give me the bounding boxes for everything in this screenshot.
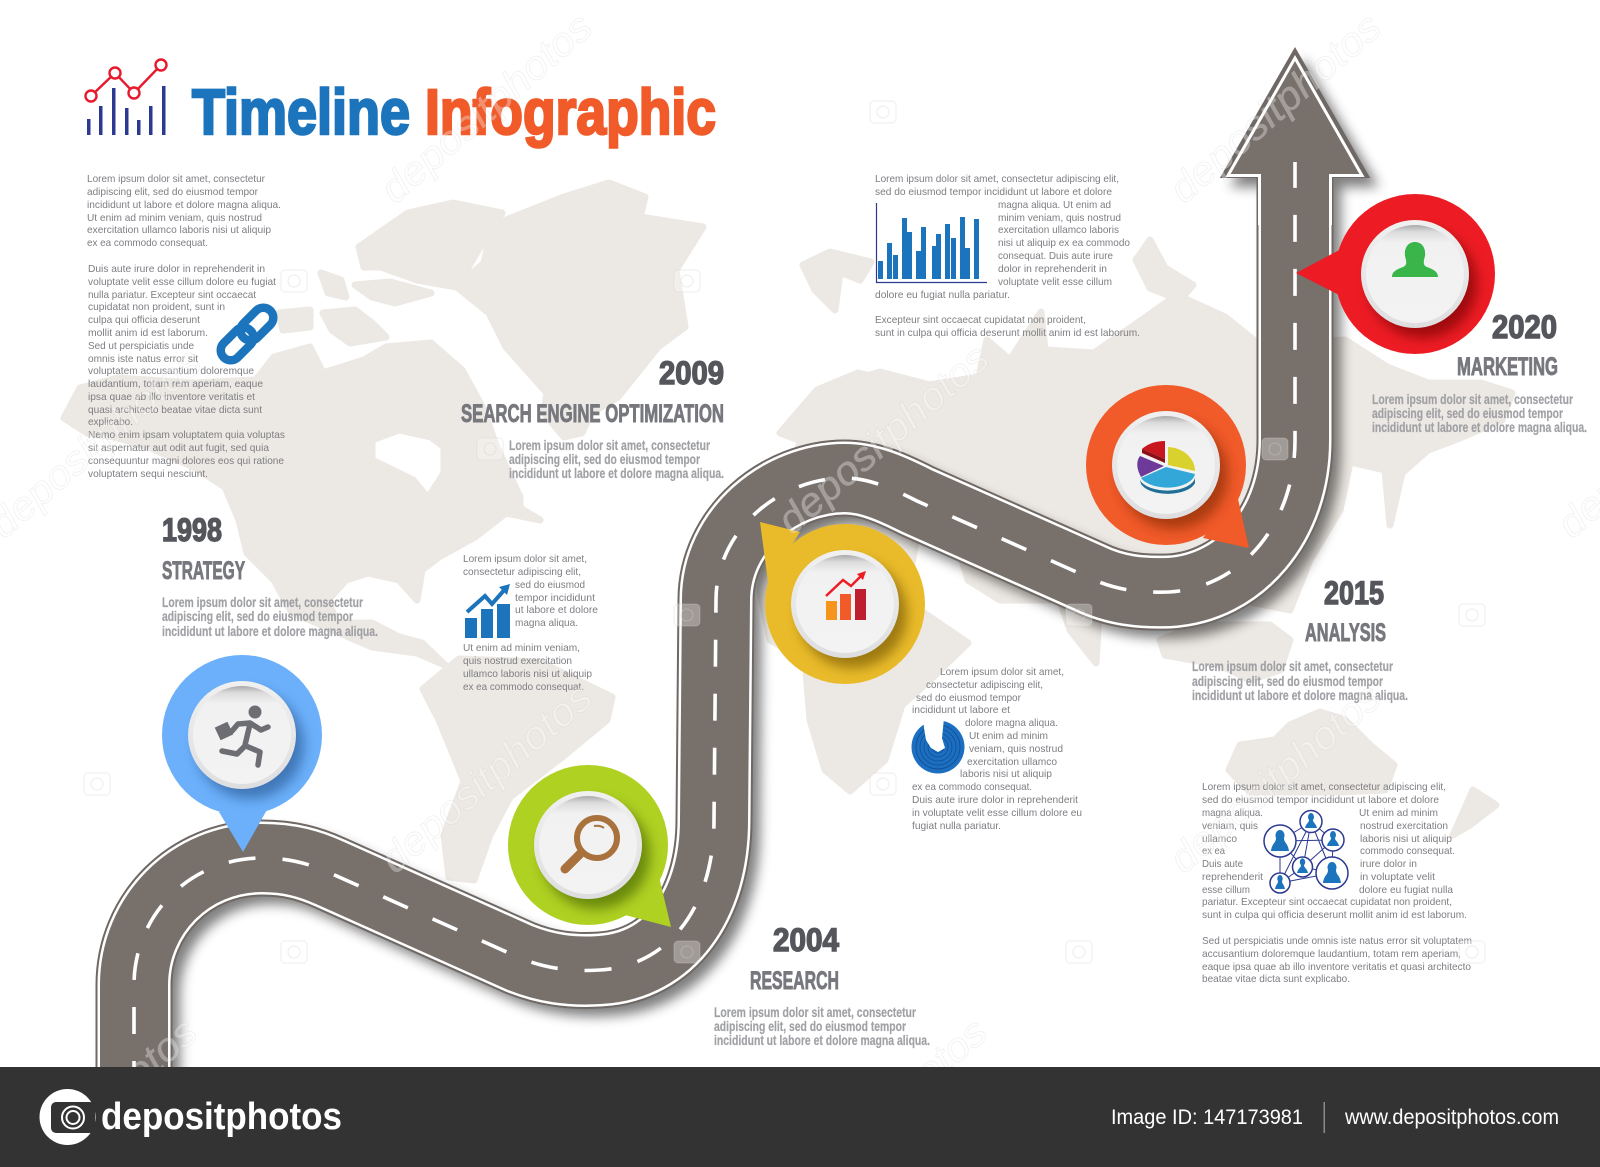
title icon: chart — [86, 60, 166, 135]
text block: middle left with growth chart: ullamco laboris nisi ut aliquip — [463, 669, 592, 680]
text block: top left: omnis iste natus error sit — [88, 354, 198, 365]
milestone 2009: yellow pin — [760, 522, 925, 684]
watermarks: depositphotos — [769, 336, 998, 543]
text block: middle left with growth chart: consectetur adipiscing elit, — [463, 567, 581, 578]
text block: top centre with bar chart: minim veniam, quis nostrud — [998, 213, 1121, 224]
label: 2009 search engine optimization: SEARCH ENGINE OPTIMIZATION — [461, 400, 724, 428]
milestone 1998: blue pin — [162, 655, 322, 852]
text block: top left: culpa qui officia deserunt — [88, 315, 200, 326]
icon: pie chart — [1137, 441, 1195, 494]
text block: centre with radial chart: exercitation ullamco — [967, 757, 1057, 768]
text block: lower right with network icon — [1202, 782, 1472, 985]
text block: top left: Lorem ipsum dolor sit amet, consectetur — [87, 174, 266, 185]
text block: top left: incididunt ut labore et dolore magna aliqua. — [87, 200, 281, 211]
text block: top centre with bar chart: Lorem ipsum dolor sit amet, consectetur adipiscing elit, — [875, 174, 1119, 185]
label: 1998 strategy: STRATEGY — [162, 557, 245, 585]
label: 2009 search engine optimization: 2009 — [659, 355, 724, 391]
text block: lower right with network icon: Ut enim ad minim — [1359, 808, 1438, 819]
icon: person — [1392, 242, 1438, 277]
text block: top centre with bar chart: Excepteur sint occaecat cupidatat non proident, — [875, 315, 1086, 326]
text block: centre with radial chart: Ut enim ad minim — [969, 731, 1048, 742]
text block: centre with radial chart: incididunt ut labore et — [912, 705, 1010, 716]
label: 2004 research: RESEARCH — [750, 967, 839, 995]
label: 2009 search engine optimization: adipiscing elit, sed do eiusmod tempor — [509, 452, 701, 467]
world map — [64, 183, 1512, 880]
footer image id: Image ID: 147173981 — [1111, 1106, 1303, 1129]
text block: middle left with growth chart: magna aliqua. — [515, 618, 578, 629]
text block: centre with radial chart: fugiat nulla pariatur. — [912, 821, 1001, 832]
road shadow — [143, 59, 1379, 1099]
label: 2020 marketing — [1372, 309, 1587, 435]
text block: top left: ipsa quae ab illo inventore veritatis et — [88, 392, 255, 403]
text block: lower right with network icon: irure dolor in — [1360, 859, 1417, 870]
label: 1998 strategy: 1998 — [162, 512, 222, 548]
text block: top centre with bar chart: dolore eu fugiat nulla pariatur. — [875, 290, 1010, 301]
text block: centre with radial chart: sed do eiusmod tempor — [916, 693, 1022, 704]
text block: centre with radial chart: veniam, quis nostrud — [969, 744, 1063, 755]
footer url: www.depositphotos.com — [1344, 1106, 1559, 1129]
text block: lower right with network icon: Sed ut perspiciatis unde omnis iste natus error sit voluptatem — [1202, 936, 1472, 947]
icon: running businessman — [215, 706, 268, 765]
watermarks: depositphotos — [372, 5, 601, 212]
icon: magnifier — [565, 818, 617, 869]
text block: lower right with network icon: magna aliqua. — [1202, 808, 1263, 819]
icon: people network — [1264, 810, 1348, 893]
watermarks: depositphotos — [372, 675, 601, 882]
text block: top left: sit aspernatur aut odit aut fugit, sed quia — [88, 443, 269, 454]
text block: lower right with network icon: laboris nisi ut aliquip — [1360, 834, 1452, 845]
footer logo — [40, 1089, 342, 1145]
road surface — [134, 178, 1295, 1090]
label: 2015 analysis — [1192, 575, 1408, 703]
bar chart — [876, 203, 987, 282]
text block: centre with radial chart: consectetur adipiscing elit, — [926, 680, 1043, 691]
label: 2015 analysis: 2015 — [1324, 575, 1384, 611]
text block: top centre with bar chart: sunt in culpa qui officia deserunt mollit anim id est laborum. — [875, 328, 1140, 339]
road — [134, 53, 1379, 1099]
text block: top left: consequuntur magni dolores eos qui ratione — [88, 456, 284, 467]
text block: top left: exercitation ullamco laboris nisi ut aliquip — [87, 225, 271, 236]
text block: top centre with bar chart — [875, 174, 1140, 339]
text block: lower right with network icon: sed do eiusmod tempor incididunt ut labore et dolore — [1202, 795, 1439, 806]
text block: middle left with growth chart: ut labore et dolore — [515, 605, 598, 616]
text block: top left: laudantium, totam rem aperiam, eaque — [88, 379, 263, 390]
text block: lower right with network icon: esse cillum — [1202, 885, 1250, 896]
text block: top left: quasi architecto beatae vitae dicta sunt — [88, 405, 262, 416]
label: 2004 research: incididunt ut labore et dolore magna aliqua. — [714, 1033, 930, 1048]
text block: centre with radial chart — [912, 667, 1082, 832]
text block: lower right with network icon: accusantium doloremque laudantium, totam rem aperiam, — [1202, 949, 1461, 960]
text block: lower right with network icon: dolore eu fugiat nulla — [1359, 885, 1453, 896]
text block: centre with radial chart: Lorem ipsum dolor sit amet, — [940, 667, 1064, 678]
text block: centre with radial chart: dolore magna aliqua. — [965, 718, 1058, 729]
text block: lower right with network icon: Lorem ipsum dolor sit amet, consectetur adipiscing elit, — [1202, 782, 1446, 793]
text block: lower right with network icon: beatae vitae dicta sunt explicabo. — [1202, 974, 1350, 985]
text block: centre with radial chart: Duis aute irure dolor in reprehenderit — [912, 795, 1078, 806]
text block: top centre with bar chart: voluptate velit esse cillum — [998, 277, 1112, 288]
text block: top centre with bar chart: nisi ut aliquip ex ea commodo — [998, 238, 1130, 249]
label: 2009 search engine optimization — [461, 355, 724, 481]
icon: radial chart — [912, 718, 964, 774]
text block: lower right with network icon: sunt in culpa qui officia deserunt mollit anim id est laborum. — [1202, 910, 1467, 921]
label: 2009 search engine optimization: incididunt ut labore et dolore magna aliqua. — [509, 466, 724, 481]
footer logo: depositphotos — [101, 1096, 342, 1138]
text block: middle left with growth chart: Ut enim ad minim veniam, — [463, 643, 580, 654]
text block: lower right with network icon: commodo consequat. — [1360, 846, 1455, 857]
label: 2020 marketing: 2020 — [1492, 309, 1557, 345]
text block: lower right with network icon: Duis aute — [1202, 859, 1243, 870]
label: 2004 research: Lorem ipsum dolor sit amet, consectetur — [714, 1005, 917, 1020]
text block: lower right with network icon: pariatur. Excepteur sint occaecat cupidatat non proident, — [1202, 897, 1452, 908]
title: Timeline — [192, 76, 410, 148]
text block: top centre with bar chart: dolor in reprehenderit in — [998, 264, 1107, 275]
text block: middle left with growth chart: tempor incididunt — [515, 593, 595, 604]
text block: middle left with growth chart: Lorem ipsum dolor sit amet, — [463, 554, 587, 565]
milestone 2004: green pin — [508, 765, 671, 927]
text block: top left: voluptatem accusantium doloremque — [88, 366, 254, 377]
text block: top left: voluptate velit esse cillum dolore eu fugiat — [88, 277, 276, 288]
label: 2015 analysis: ANALYSIS — [1305, 619, 1386, 647]
label: 2015 analysis: adipiscing elit, sed do eiusmod tempor — [1192, 674, 1384, 689]
text block: lower right with network icon: eaque ipsa quae ab illo inventore veritatis et quasi architecto — [1202, 962, 1471, 973]
text block: lower right with network icon: ullamco — [1202, 834, 1237, 845]
watermarks: depositphotos — [1161, 675, 1390, 882]
text block: top left — [87, 174, 285, 480]
text block: top left: ex ea commodo consequat. — [87, 238, 208, 249]
label: 1998 strategy: adipiscing elit, sed do eiusmod tempor — [162, 609, 354, 624]
icon: rising bars — [826, 571, 866, 620]
text block: top centre with bar chart: magna aliqua. Ut enim ad — [998, 200, 1111, 211]
text block: top left: mollit anim id est laborum. — [88, 328, 208, 339]
text block: top centre with bar chart: consequat. Duis aute irure — [998, 251, 1113, 262]
milestone 2020: red pin — [1296, 194, 1495, 354]
text block: top centre with bar chart: sed do eiusmod tempor incididunt ut labore et dolore — [875, 187, 1112, 198]
label: 1998 strategy: Lorem ipsum dolor sit amet, consectetur — [162, 595, 364, 610]
text block: top left: adipiscing elit, sed do eiusmod tempor — [87, 187, 259, 198]
icon: chain link — [217, 304, 277, 364]
label: 2015 analysis: incididunt ut labore et dolore magna aliqua. — [1192, 688, 1408, 703]
label: 1998 strategy — [162, 512, 378, 639]
footer bar — [0, 1067, 1600, 1167]
text block: centre with radial chart: in voluptate velit esse cillum dolore eu — [912, 808, 1082, 819]
text block: middle left with growth chart: quis nostrud exercitation — [463, 656, 572, 667]
text block: top centre with bar chart: exercitation ullamco laboris — [998, 225, 1119, 236]
text block: lower right with network icon: veniam, quis — [1202, 821, 1258, 832]
arrow head — [1225, 53, 1365, 225]
label: 2004 research — [714, 922, 930, 1048]
text block: middle left with growth chart: ex ea commodo consequat. — [463, 682, 584, 693]
label: 1998 strategy: incididunt ut labore et dolore magna aliqua. — [162, 624, 378, 639]
label: 2009 search engine optimization: Lorem ipsum dolor sit amet, consectetur — [509, 438, 711, 453]
watermarks: depositphotos — [1161, 5, 1390, 212]
text block: centre with radial chart: laboris nisi ut aliquip — [960, 769, 1052, 780]
icon: growth chart — [465, 584, 510, 638]
milestone 2015: orange pin — [1086, 385, 1249, 548]
label: 2004 research: adipiscing elit, sed do eiusmod tempor — [714, 1019, 907, 1034]
text block: top left: Duis aute irure dolor in reprehenderit in — [88, 264, 265, 275]
text block: lower right with network icon: in voluptate velit — [1360, 872, 1435, 883]
text block: top left: cupidatat non proident, sunt in — [88, 302, 225, 313]
text block: centre with radial chart: ex ea commodo consequat. — [912, 782, 1032, 793]
text block: middle left with growth chart — [463, 554, 598, 693]
text block: top left: Sed ut perspiciatis unde — [88, 341, 194, 352]
text block: top left: Ut enim ad minim veniam, quis nostrud — [87, 213, 262, 224]
title — [192, 76, 716, 148]
text block: lower right with network icon: nostrud exercitation — [1360, 821, 1448, 832]
text block: top left: explicabo. — [88, 417, 133, 428]
label: 2015 analysis: Lorem ipsum dolor sit amet, consectetur — [1192, 659, 1394, 674]
text block: top left: voluptatem sequi nesciunt. — [88, 469, 208, 480]
text block: lower right with network icon: ex ea — [1202, 846, 1225, 857]
label: 2004 research: 2004 — [773, 922, 839, 958]
text block: lower right with network icon: reprehenderit — [1202, 872, 1263, 883]
text block: top left: nulla pariatur. Excepteur sint occaecat — [88, 290, 256, 301]
text block: middle left with growth chart: sed do eiusmod — [515, 580, 585, 591]
text block: top left: Nemo enim ipsam voluptatem quia voluptas — [88, 430, 285, 441]
title: Infographic — [425, 76, 716, 148]
centre dashes — [134, 162, 1295, 1090]
